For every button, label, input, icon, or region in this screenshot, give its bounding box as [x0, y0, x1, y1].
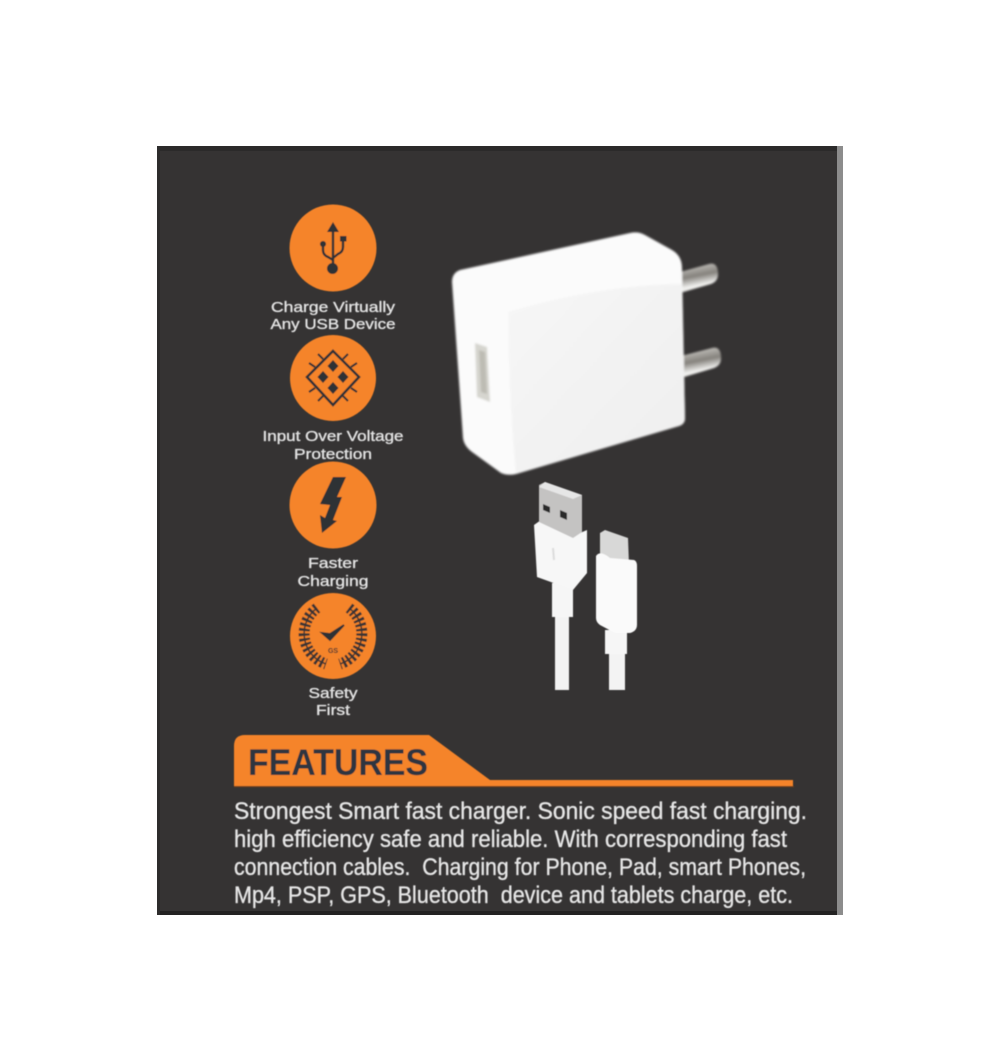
- feature: Faster Charging: [290, 462, 376, 590]
- feature: Input Over Voltage Protection: [262, 335, 404, 463]
- label: Charge Virtually Any USB Device: Any USB Device: [270, 317, 396, 333]
- product: USB-C cable: [596, 530, 637, 690]
- label: Faster Charging: Faster: [308, 556, 358, 572]
- product: wall charger: [452, 232, 721, 475]
- label: Safety First: Safety: [308, 686, 358, 702]
- product: USB-A cable: [534, 482, 587, 690]
- icon: laurel badge: GS: [328, 648, 338, 655]
- text block: features description: high efficiency safe and reliable. With corresponding fast: [234, 826, 787, 853]
- label: Charge Virtually Any USB Device: Charge Virtually: [271, 300, 396, 316]
- label: Input Over Voltage Protection: Input Over Voltage: [262, 429, 404, 445]
- label: Faster Charging: [298, 556, 368, 590]
- label: Input Over Voltage Protection: [262, 429, 404, 463]
- label: Safety First: First: [316, 703, 350, 719]
- label: Faster Charging: Charging: [298, 574, 368, 590]
- text block: features description: connection cables. Charging for Phone, Pad, smart Phones,: [234, 854, 806, 881]
- text block: features description: [234, 798, 807, 909]
- text block: features description: Mp4, PSP, GPS, Bluetooth device and tablets charge, etc.: [234, 882, 793, 909]
- label: Input Over Voltage Protection: Protection: [294, 447, 372, 463]
- USB port: [475, 343, 490, 402]
- charger body: [452, 232, 685, 475]
- feature: Safety First: [290, 593, 376, 719]
- text block: features description: Strongest Smart fast charger. Sonic speed fast charging.: [234, 798, 807, 825]
- icon: USB: [290, 204, 376, 292]
- banner tab and rule: [234, 735, 793, 787]
- feature: Charge Virtually Any USB Device: [270, 204, 396, 333]
- heading text: FEATURES: [248, 742, 428, 783]
- charger pins: [680, 264, 721, 378]
- panel: dark background: [157, 146, 843, 915]
- label: Safety First: [308, 686, 358, 719]
- icon: protection chip: [290, 335, 376, 421]
- features heading banner: [234, 735, 794, 788]
- label: Charge Virtually Any USB Device: [270, 300, 396, 333]
- icon: lightning bolt: [290, 462, 376, 548]
